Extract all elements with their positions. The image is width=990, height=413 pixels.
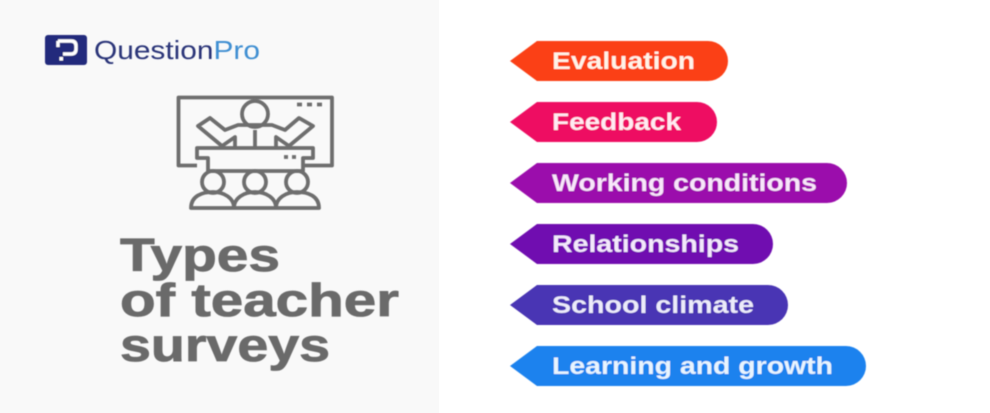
logo wordmark: Question Pro <box>94 35 260 65</box>
title: surveys <box>120 319 330 371</box>
title: of teacher <box>120 274 399 326</box>
student shoulders <box>191 192 319 208</box>
teacher arms and body <box>198 118 313 147</box>
label: School climate <box>510 285 788 325</box>
label: Evaluation <box>510 41 728 81</box>
student heads <box>202 171 224 193</box>
title: Types <box>120 229 280 281</box>
label: Relationships: Relationships <box>552 231 739 258</box>
title <box>120 229 399 371</box>
icon: teacher at lectern with students <box>178 98 332 208</box>
label: Relationships <box>510 224 773 264</box>
teacher head <box>242 101 268 127</box>
label: School climate: School climate <box>552 292 754 319</box>
label: Learning and growth <box>510 346 866 386</box>
label: Working conditions <box>510 163 847 203</box>
presentation board <box>178 98 332 166</box>
label: Feedback: Feedback <box>552 109 682 136</box>
lectern <box>197 148 313 171</box>
logo: QuestionPro <box>45 35 260 65</box>
panel: left background <box>0 0 439 413</box>
label: Working conditions: Working conditions <box>552 170 817 197</box>
label: Evaluation: Evaluation <box>552 48 695 75</box>
label: Learning and growth: Learning and growth <box>552 353 833 380</box>
lectern dots <box>284 155 296 159</box>
board dots <box>297 103 323 106</box>
label: Feedback <box>510 102 717 142</box>
icon: logo mark <box>45 35 87 65</box>
